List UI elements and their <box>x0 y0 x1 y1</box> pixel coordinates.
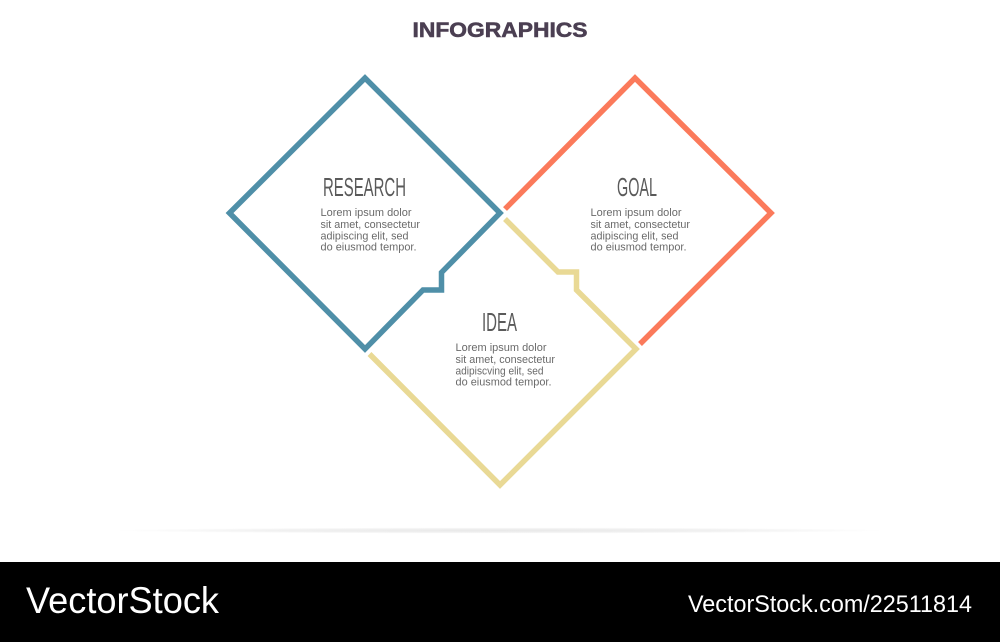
text block: research <box>320 172 420 254</box>
body: goal: Lorem ipsum dolor <box>590 207 682 219</box>
body: research: Lorem ipsum dolor <box>320 207 412 219</box>
body: research: do eiusmod tempor. <box>320 242 416 254</box>
diamond: idea (yellow outline) <box>370 219 636 485</box>
body: goal <box>590 207 690 254</box>
heading: idea: IDEA <box>482 307 517 337</box>
footer bar <box>0 562 1000 642</box>
diamond: research (blue outline) <box>230 78 500 349</box>
body: idea: do eiusmod tempor. <box>456 376 552 388</box>
body: goal: sit amet, consectetur <box>590 219 690 231</box>
body: research <box>320 207 420 254</box>
ground shadow <box>115 528 885 534</box>
text block: goal <box>590 172 690 254</box>
body: goal: adipiscing elit, sed <box>590 230 678 242</box>
body: idea: sit amet, consectetur <box>456 354 555 366</box>
heading: goal: GOAL <box>617 172 657 202</box>
footer logo: VectorStock <box>26 580 219 621</box>
body: goal: do eiusmod tempor. <box>590 242 686 254</box>
text block: idea <box>456 307 555 388</box>
title: INFOGRAPHICS <box>412 18 588 42</box>
footer id: VectorStock.com/22511814 <box>688 591 972 618</box>
heading: research: RESEARCH <box>323 172 406 202</box>
body: idea <box>456 342 555 388</box>
body: idea: Lorem ipsum dolor <box>456 342 547 354</box>
body: idea: adipiscving elit, sed <box>456 366 544 378</box>
diamond: goal (orange outline) <box>505 78 771 344</box>
body: research: adipiscing elit, sed <box>320 230 408 242</box>
body: research: sit amet, consectetur <box>320 219 420 231</box>
